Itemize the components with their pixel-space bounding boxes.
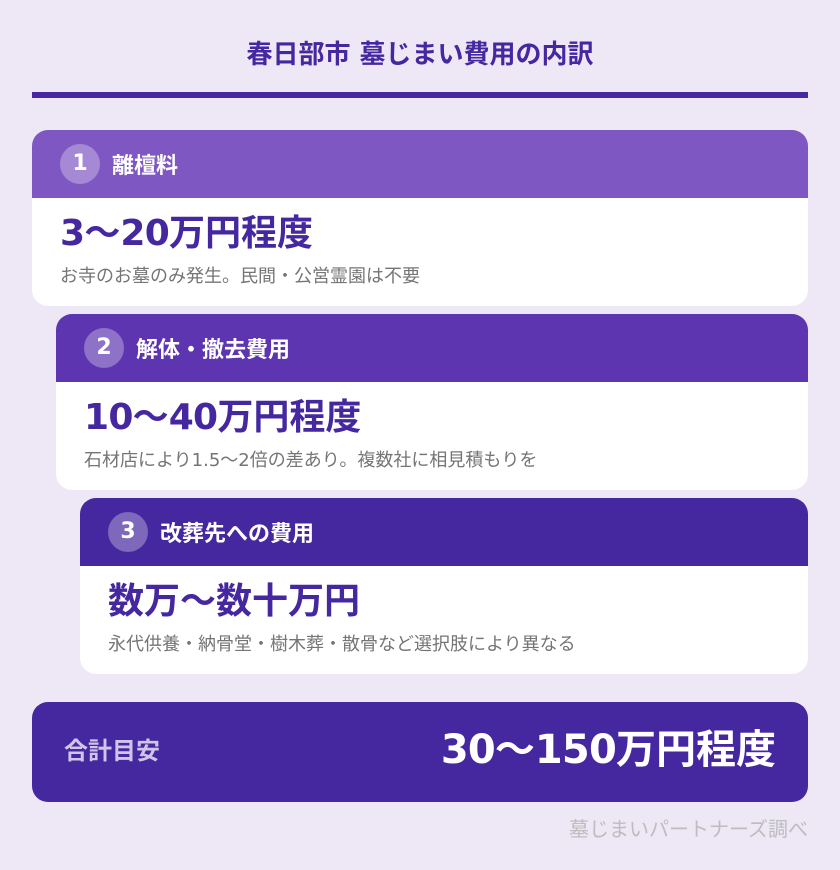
step 2 number badge: 2 bbox=[96, 335, 112, 360]
step 3 number badge bbox=[108, 512, 148, 552]
panel: step 1 bbox=[32, 130, 808, 306]
title: 春日部市 墓じまい費用の内訳 bbox=[246, 40, 594, 70]
step 2 note: 石材店により1.5～2倍の差あり。複数社に相見積もりを bbox=[84, 450, 537, 471]
step 2 header bbox=[56, 314, 808, 382]
step 1 note: お寺のお墓のみ発生。民間・公営霊園は不要 bbox=[60, 266, 420, 287]
step 3 number badge: 3 bbox=[120, 519, 136, 544]
step 1 heading: 離檀料 bbox=[112, 154, 178, 179]
panel: total bbox=[32, 702, 808, 802]
step 1 number badge bbox=[60, 144, 100, 184]
step 3 heading: 改葬先への費用 bbox=[160, 522, 314, 547]
step 3 header bbox=[80, 498, 808, 566]
step 1 header bbox=[32, 130, 808, 198]
panel: step 2 bbox=[56, 314, 808, 490]
source note: 墓じまいパートナーズ調べ bbox=[569, 817, 808, 841]
step 3 cost: 数万～数十万円 bbox=[108, 581, 360, 622]
title rule bbox=[32, 92, 808, 98]
step 3 note: 永代供養・納骨堂・樹木葬・散骨など選択肢により異なる bbox=[108, 634, 576, 655]
step 2 cost: 10～40万円程度 bbox=[84, 397, 361, 438]
step 2 number badge bbox=[84, 328, 124, 368]
total amount: 30～150万円程度 bbox=[441, 727, 776, 773]
step 2 heading: 解体・撤去費用 bbox=[136, 338, 290, 363]
total label: 合計目安 bbox=[64, 737, 160, 765]
panel: step 3 bbox=[80, 498, 808, 674]
step 1 cost: 3～20万円程度 bbox=[60, 213, 313, 254]
step 1 number badge: 1 bbox=[72, 151, 88, 176]
